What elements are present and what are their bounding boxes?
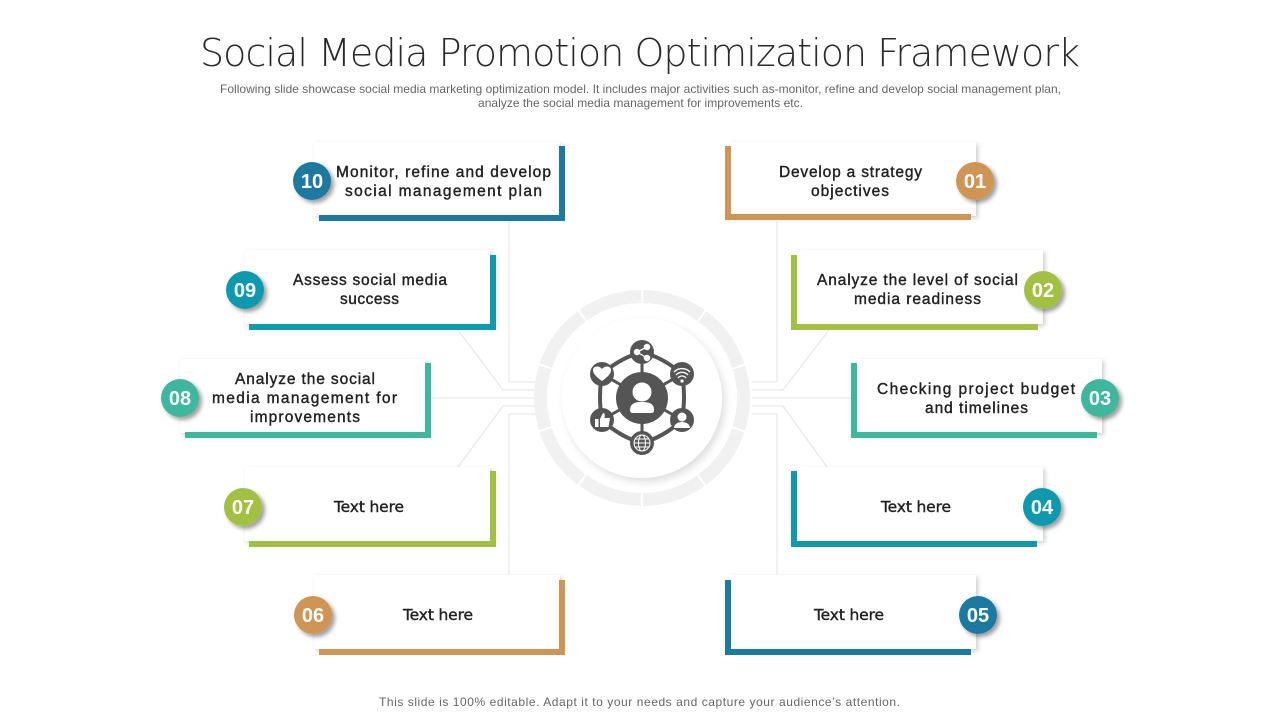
badge 03 — [1081, 379, 1119, 417]
card 02 text: media readiness — [854, 291, 981, 308]
card 03 text: Checking project budget — [877, 381, 1076, 398]
card 03 — [851, 359, 1119, 438]
badge 06: 06 — [302, 605, 324, 627]
card 09 text: Assess social media — [293, 272, 447, 289]
card 01 text: Develop a strategy — [779, 164, 922, 181]
badge 02: 02 — [1032, 280, 1054, 302]
card 07 — [224, 467, 496, 547]
card 07 text: Text here — [333, 498, 404, 516]
badge 05: 05 — [967, 605, 989, 627]
badge 08 — [161, 379, 199, 417]
card 09 text: success — [340, 291, 399, 308]
badge 09 — [226, 271, 264, 309]
badge 07: 07 — [232, 497, 254, 519]
badge 05 — [959, 596, 997, 634]
card 01 text: objectives — [811, 183, 889, 200]
card 10 text: social management plan — [345, 183, 542, 200]
badge 04 — [1023, 488, 1061, 526]
title: Social Media Promotion Optimization Framework — [200, 31, 1080, 75]
card 03 text: and timelines — [925, 400, 1028, 417]
card 10 — [293, 142, 565, 221]
badge 06 — [294, 596, 332, 634]
footer note: This slide is 100% editable. Adapt it to your needs and capture your audience’s attention. — [379, 695, 900, 709]
icon: social network — [590, 340, 694, 455]
card 02 text — [817, 272, 1018, 308]
subtitle: Following slide showcase social media marketing optimization model. It includes major activities such as-monitor, refine and develop social management plan, — [220, 82, 1061, 96]
icon: share — [634, 344, 650, 361]
badge 01: 01 — [964, 171, 986, 193]
icon: globe — [634, 435, 650, 451]
card 05 — [725, 575, 997, 655]
card 08 — [161, 359, 431, 438]
icon: user — [674, 412, 690, 428]
card 09 text — [293, 272, 447, 308]
badge 08: 08 — [169, 388, 191, 410]
icon: wifi — [674, 369, 690, 382]
card 01 text — [779, 164, 922, 200]
card 04 text: Text here — [880, 498, 951, 516]
card 09 — [226, 250, 496, 330]
segmented outer ring — [539, 295, 745, 501]
card 01 — [725, 142, 994, 220]
icon: thumbs up — [595, 413, 610, 427]
badge 03: 03 — [1089, 388, 1111, 410]
card 03 text — [877, 381, 1076, 417]
icon: heart — [593, 366, 611, 381]
card 08 text — [212, 371, 397, 426]
card 05 text: Text here — [813, 606, 884, 624]
card 08 text: Analyze the social — [235, 371, 375, 388]
badge 04: 04 — [1031, 497, 1054, 519]
badge 10: 10 — [301, 171, 323, 193]
card 02 text: Analyze the level of social — [817, 272, 1018, 289]
badge 01 — [956, 162, 994, 200]
card 10 text: Monitor, refine and develop — [336, 164, 551, 181]
badge 02 — [1024, 271, 1062, 309]
central hub — [539, 295, 745, 501]
connector lines — [431, 221, 851, 575]
card 08 text: improvements — [250, 409, 360, 426]
card 08 text: media management for — [212, 390, 397, 407]
card 04 — [791, 467, 1061, 547]
card 06 — [294, 575, 565, 655]
card 10 text — [336, 164, 551, 200]
subtitle: analyze the social media management for improvements etc. — [478, 96, 803, 110]
badge 07 — [224, 488, 262, 526]
badge 09: 09 — [234, 280, 256, 302]
icon: person — [630, 382, 654, 413]
badge 10 — [293, 162, 331, 200]
subtitle — [220, 82, 1061, 110]
white inner disc — [562, 318, 722, 478]
card 06 text: Text here — [402, 606, 473, 624]
card 02 — [791, 250, 1062, 330]
